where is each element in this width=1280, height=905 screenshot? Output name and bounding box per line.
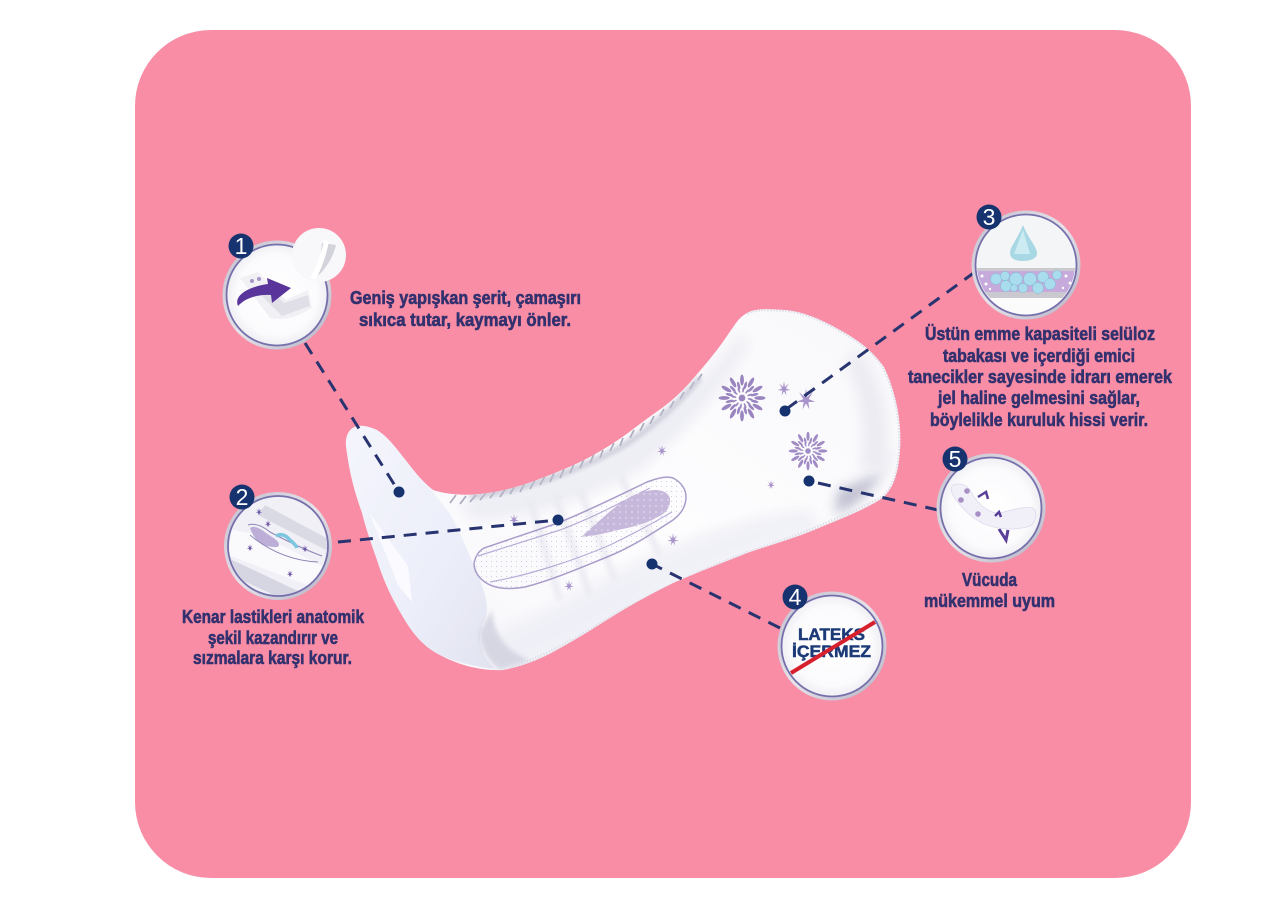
right stitched edge: [747, 309, 900, 497]
callout 1 text: [350, 287, 581, 330]
number badge 3: 3: [983, 204, 995, 230]
callout 5 text: Vücuda: [962, 569, 1018, 590]
icon: pad with adhesive strip and arrow: [237, 272, 312, 319]
callout 2 text: şekil kazandırır ve: [208, 627, 338, 648]
latex free label: LATEKS: [798, 625, 865, 644]
red strike-through: [791, 622, 875, 673]
leader line 4: [646, 558, 780, 628]
leader line 5: [804, 476, 938, 510]
product illustration: incontinence pad: [346, 309, 900, 670]
vertical channels: [530, 475, 660, 600]
number badge 4: 4: [789, 584, 802, 610]
medium flower: [789, 432, 827, 470]
lower stitched edge: [510, 497, 884, 668]
leader line 2: [338, 514, 564, 542]
small stars: [509, 381, 815, 591]
perforated centre zone: [474, 477, 686, 588]
leader line 1: [305, 343, 404, 498]
elastic ruffle: [450, 374, 702, 504]
icon: pad close-up: [228, 505, 330, 600]
callout 5 text: [924, 569, 1055, 611]
number badge 5: 5: [949, 446, 961, 472]
callout 3 text: tabakası ve içerdiği emici: [943, 345, 1135, 366]
leader line 3: [780, 272, 975, 416]
callout 1 text: Geniş yapışkan şerit, çamaşırı: [350, 287, 581, 308]
callout 3 text: jel haline gelmesini sağlar,: [937, 387, 1140, 408]
pad body: [346, 309, 900, 670]
left folded flap: [346, 426, 495, 669]
callout 2 text: Kenar lastikleri anatomik: [182, 606, 365, 627]
callout 1 text: sıkıca tutar, kaymayı önler.: [359, 309, 571, 330]
callout 1: adhesive strip: [222, 228, 346, 350]
latex free label: [792, 625, 871, 661]
callout 2 text: sızmalara karşı korur.: [193, 647, 352, 668]
callout 5 text: mükemmel uyum: [924, 590, 1055, 611]
icon: droplet above absorbent layer: [977, 225, 1075, 298]
large flower: [718, 374, 766, 422]
callout 5: body fit: [936, 446, 1046, 562]
callout 3 text: [908, 323, 1173, 430]
inset circle: [292, 228, 346, 282]
callout 2 text: [182, 606, 365, 668]
latex free label: İÇERMEZ: [792, 642, 871, 661]
number badge 2: 2: [236, 484, 248, 510]
purple teardrop: [581, 490, 670, 537]
pad shading: [346, 309, 900, 670]
callout 4: latex free: [778, 584, 886, 700]
callout 3 text: Üstün emme kapasiteli selüloz: [925, 323, 1155, 344]
icon: curved pad: [951, 484, 1036, 540]
callout 3: absorbent core: [972, 204, 1080, 320]
callout 3 text: tanecikler sayesinde idrarı emerek: [908, 366, 1173, 387]
pink background panel: [135, 30, 1191, 878]
second contour line: [478, 488, 672, 582]
number badge 1: 1: [235, 233, 247, 259]
callout 2: elastic edges: [224, 484, 332, 600]
callout 3 text: böylelikle kuruluk hissi verir.: [930, 409, 1148, 430]
